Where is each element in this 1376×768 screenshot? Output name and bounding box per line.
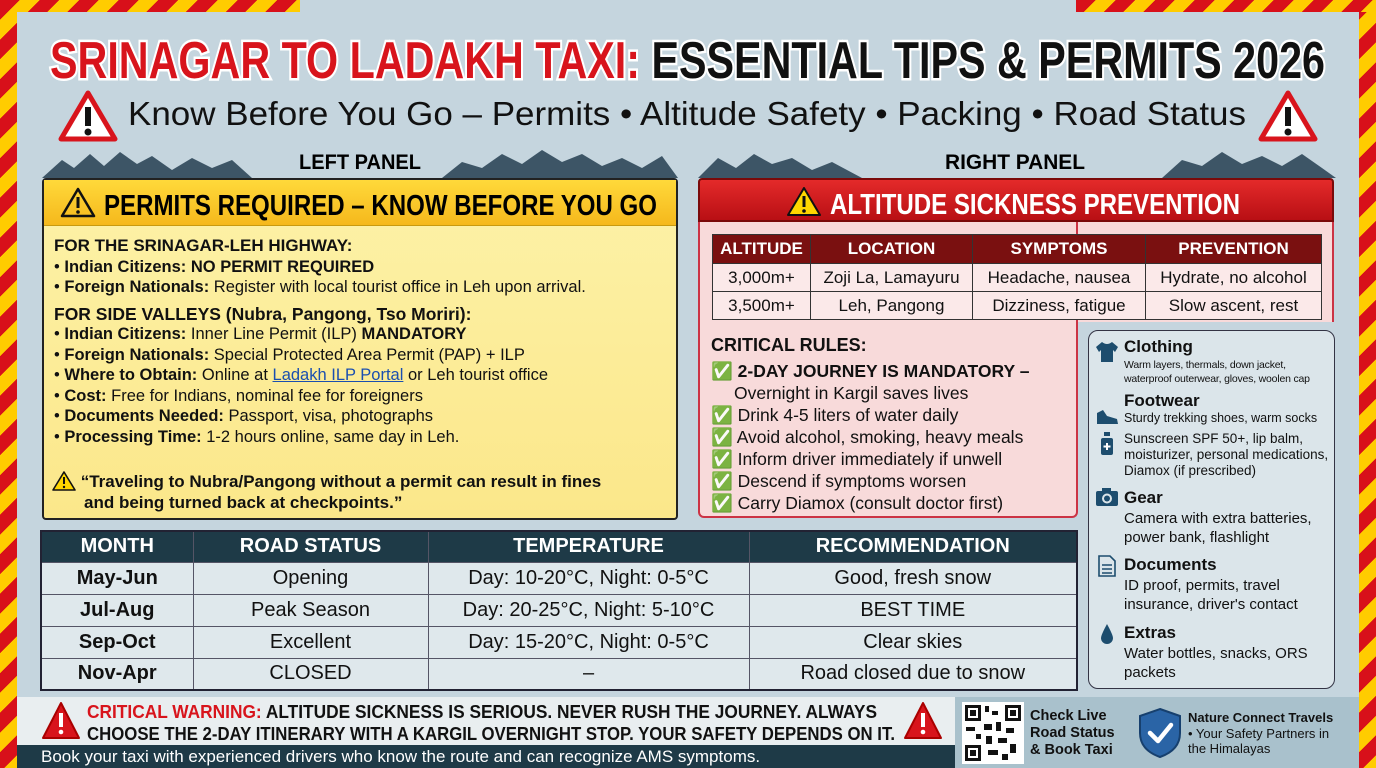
- permits text: • Indian Citizens: NO PERMIT REQUIRED: [54, 258, 374, 276]
- road status table: Opening: [273, 566, 348, 588]
- panel: packing list: Warm layers, thermals, down jacket,: [1124, 359, 1286, 371]
- altitude table: 3,000m+: [728, 268, 795, 286]
- altitude table: LOCATION: [848, 239, 935, 258]
- altitude body: [698, 222, 1078, 518]
- permits text: [54, 236, 586, 446]
- altitude table: Slow ascent, rest: [1169, 296, 1298, 314]
- panel: packing list: Water bottles, snacks, ORS packets: [1124, 645, 1308, 681]
- right panel label: RIGHT PANEL: [945, 151, 1085, 174]
- panel: packing list: ID proof, permits, travel insurance, driver's contact: [1124, 577, 1298, 613]
- permits text: • Indian Citizens: Inner Line Permit (ILP) MANDATORY: [54, 325, 467, 343]
- road status table: Nov-Apr: [78, 662, 157, 684]
- altitude table: PREVENTION: [1178, 239, 1289, 258]
- footer right: qr and brand: & Book Taxi: [1030, 742, 1113, 758]
- road status table: MONTH: [81, 535, 154, 557]
- panel: altitude sickness: [698, 178, 1334, 222]
- subtitle with warning icons: [58, 90, 1318, 142]
- footer right: qr and brand: Road Status: [1030, 725, 1115, 741]
- road status table: –: [583, 662, 594, 684]
- panel: packing list: Gear: [1124, 488, 1163, 507]
- permits text: FOR SIDE VALLEYS (Nubra, Pangong, Tso Moriri):: [54, 304, 471, 324]
- panel: packing list: Camera with extra batteries, power bank, flashlight: [1124, 510, 1312, 546]
- permit warning quote: [52, 471, 601, 512]
- permit warning quote: “Traveling to Nubra/Pangong without a permit can result in fines: [81, 472, 601, 491]
- road status table: Clear skies: [863, 630, 962, 652]
- icon: documents: [1098, 555, 1116, 577]
- icon: gear: [1096, 488, 1118, 506]
- road status table: [40, 530, 1078, 691]
- hazard border left: [0, 0, 17, 768]
- icon: sunscreen: [1101, 432, 1113, 455]
- road status table: Jul-Aug: [80, 598, 154, 620]
- altitude table: [712, 234, 1322, 320]
- footer text: Book your taxi with experienced drivers who know the route and can recognize AMS symptoms.: [41, 747, 760, 766]
- road status table: Day: 20-25°C, Night: 5-10°C: [463, 598, 714, 620]
- icon: water drop: [1101, 624, 1113, 644]
- panel: packing list: Clothing: [1124, 337, 1193, 356]
- road status table: Sep-Oct: [79, 630, 156, 652]
- altitude table: Zoji La, Lamayuru: [823, 268, 960, 286]
- critical warning bar: [17, 697, 955, 745]
- road status table: Excellent: [270, 630, 351, 652]
- altitude table: Leh, Pangong: [839, 296, 944, 314]
- road status table: Peak Season: [251, 598, 370, 620]
- hazard border top right: [1076, 0, 1376, 12]
- altitude table: 3,500m+: [728, 296, 795, 314]
- road status table: ROAD STATUS: [240, 535, 381, 557]
- altitude table: Headache, nausea: [988, 268, 1130, 286]
- hazard border right: [1359, 0, 1376, 768]
- permits text: • Foreign Nationals: Register with local tourist office in Leh upon arrival.: [54, 278, 586, 296]
- road status table: CLOSED: [269, 662, 352, 684]
- icon: clothing: [1096, 342, 1118, 362]
- altitude table: ALTITUDE: [720, 239, 803, 258]
- permits text: • Where to Obtain: Online at Ladakh ILP Portal or Leh tourist office: [54, 366, 548, 384]
- critical rules: [711, 335, 1029, 513]
- road status table: May-Jun: [77, 566, 158, 588]
- panel: packing list: Footwear: [1124, 391, 1200, 410]
- permits text: • Processing Time: 1-2 hours online, same day in Leh.: [54, 428, 459, 446]
- altitude table: Hydrate, no alcohol: [1160, 268, 1307, 286]
- icon: qr code: [962, 702, 1024, 764]
- road status table: Road closed due to snow: [800, 662, 1025, 684]
- panel: packing list: Sunscreen SPF 50+, lip balm, moisturizer, personal medications, Diamox (if prescribed): [1124, 431, 1328, 478]
- subtitle with warning icons: Know Before You Go – Permits • Altitude Safety • Packing • Road Status: [128, 95, 1246, 132]
- left panel label: LEFT PANEL: [299, 151, 421, 174]
- critical rules: CRITICAL RULES:: [711, 335, 867, 355]
- footer right: qr and brand: Check Live: [1030, 708, 1107, 724]
- critical rules: ✅ 2-DAY JOURNEY IS MANDATORY –: [711, 361, 1029, 381]
- road status table: BEST TIME: [860, 598, 965, 620]
- road status table: Day: 10-20°C, Night: 0-5°C: [468, 566, 709, 588]
- panel: permits: [42, 178, 678, 520]
- critical rules: ✅ Drink 4-5 liters of water daily: [711, 405, 958, 425]
- footer right: qr and brand: Nature Connect Travels: [1188, 710, 1333, 725]
- panel: packing list: Documents: [1124, 555, 1217, 574]
- footer text: [17, 745, 955, 768]
- critical rules: ✅ Avoid alcohol, smoking, heavy meals: [711, 427, 1023, 447]
- permits text: • Documents Needed: Passport, visa, photographs: [54, 407, 433, 425]
- critical warning bar: CRITICAL WARNING: ALTITUDE SICKNESS IS SERIOUS. NEVER RUSH THE JOURNEY. ALWAYS: [87, 702, 877, 722]
- road status table: Day: 15-20°C, Night: 0-5°C: [468, 630, 709, 652]
- permits text: • Foreign Nationals: Special Protected Area Permit (PAP) + ILP: [54, 346, 525, 364]
- critical rules: ✅ Descend if symptoms worsen: [711, 471, 966, 491]
- road status table: TEMPERATURE: [513, 535, 664, 557]
- hazard border top left: [0, 0, 300, 12]
- critical rules: ✅ Carry Diamox (consult doctor first): [711, 493, 1003, 513]
- permits text: FOR THE SRINAGAR-LEH HIGHWAY:: [54, 236, 352, 255]
- footer right: qr and brand: [955, 697, 1359, 768]
- road status table: Good, fresh snow: [834, 566, 991, 588]
- road status table: RECOMMENDATION: [816, 535, 1010, 557]
- panel: packing list: Sturdy trekking shoes, warm socks: [1124, 411, 1317, 425]
- critical rules: ✅ Inform driver immediately if unwell: [711, 449, 1002, 469]
- panel: packing list: Extras: [1124, 623, 1176, 642]
- icon: footwear: [1097, 410, 1118, 424]
- mountains decoration: [42, 150, 1336, 178]
- critical rules: Overnight in Kargil saves lives: [734, 383, 968, 403]
- altitude table: Dizziness, fatigue: [992, 296, 1126, 314]
- footer right: qr and brand: • Your Safety Partners in: [1188, 726, 1329, 740]
- footer right: qr and brand: the Himalayas: [1188, 741, 1270, 756]
- altitude table: SYMPTOMS: [1010, 239, 1107, 258]
- permits header: [44, 180, 676, 226]
- permit warning quote: and being turned back at checkpoints.”: [84, 493, 402, 512]
- panel: packing list: waterproof outerwear, gloves, woolen cap: [1124, 373, 1310, 385]
- icon: shield: [1139, 708, 1181, 758]
- permits text: • Cost: Free for Indians, nominal fee for foreigners: [54, 386, 423, 404]
- panel: packing list: [1088, 330, 1335, 689]
